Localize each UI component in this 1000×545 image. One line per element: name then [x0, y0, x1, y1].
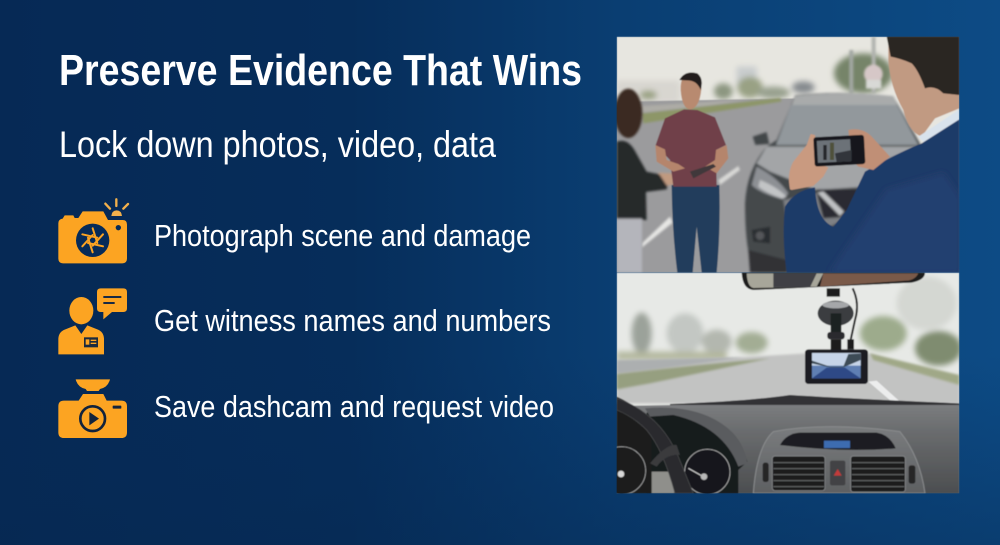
list item: photograph: Photograph scene and damage [154, 218, 531, 253]
photo: person photographing car damage at roadside [614, 37, 959, 273]
list item: dashcam: Save dashcam and request video [154, 389, 554, 424]
photo: dashcam mounted on windshield [598, 273, 962, 495]
man in maroon shirt [655, 72, 728, 273]
icon: camera with flash [58, 199, 128, 263]
title: Preserve Evidence That Wins [59, 46, 582, 95]
instrument cluster and steering wheel [647, 412, 747, 493]
icon: witness with speech bubble [58, 288, 127, 354]
dashcam mount and screen [805, 288, 868, 384]
subtitle: Lock down photos, video, data [59, 124, 496, 165]
mirror [742, 273, 925, 290]
dashboard [617, 405, 959, 493]
hands and phone [789, 129, 890, 190]
list item: witness: Get witness names and numbers [154, 303, 551, 338]
car [745, 93, 923, 273]
photographer in navy suit [888, 37, 959, 137]
icon: dashcam with play button [58, 379, 127, 438]
woman [616, 86, 674, 272]
